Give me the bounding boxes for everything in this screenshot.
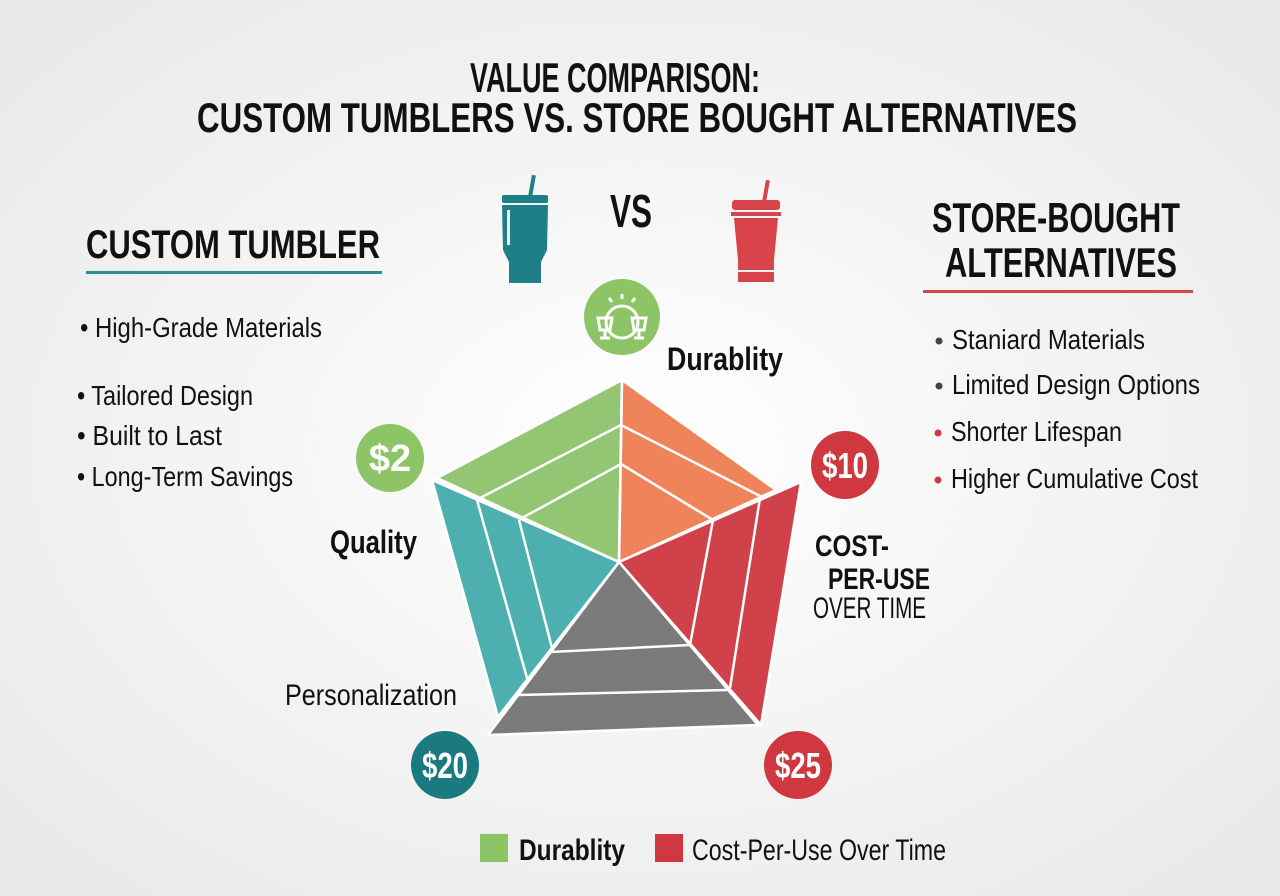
heading: custom tumbler <box>86 223 382 274</box>
list: store-bought drawbacks: Staniard Materials <box>952 324 1145 355</box>
heading: store-bought alternatives: STORE-BOUGHT <box>932 194 1180 241</box>
axis label: durability: Durablity <box>667 341 783 377</box>
title <box>197 54 1077 141</box>
legend: Cost-Per-Use Over Time <box>692 834 946 867</box>
list: store-bought drawbacks: Limited Design Options <box>952 369 1200 400</box>
icon: durability badge <box>584 279 660 355</box>
vs label: VS <box>610 185 652 237</box>
list: custom tumbler benefits: • High-Grade Materials <box>80 312 322 343</box>
legend <box>480 834 946 867</box>
badge: $10: $10 <box>822 445 868 486</box>
heading: store-bought alternatives: ALTERNATIVES <box>945 239 1177 286</box>
list: custom tumbler benefits <box>77 312 322 492</box>
badge: $25: $25 <box>775 745 821 786</box>
badge: $2: $2 <box>369 438 411 480</box>
axis label: cost-per-use: OVER TIME <box>813 592 926 625</box>
badge: $10 <box>811 431 879 499</box>
axis label: cost-per-use <box>813 530 930 625</box>
list: custom tumbler benefits: • Long-Term Savings <box>77 461 293 492</box>
list: store-bought drawbacks: Higher Cumulative Cost <box>951 463 1198 494</box>
badge: $20 <box>411 731 479 799</box>
axis label: cost-per-use: PER-USE <box>828 563 930 596</box>
icon: teal tumbler <box>502 175 548 283</box>
axis label: cost-per-use: COST- <box>815 530 889 563</box>
list: store-bought drawbacks: Shorter Lifespan <box>951 416 1122 447</box>
legend: Durablity <box>519 834 625 867</box>
axis label: quality: Quality <box>330 524 417 560</box>
heading: custom tumbler: CUSTOM TUMBLER <box>86 223 380 267</box>
axis label: personalization: Personalization <box>285 679 457 712</box>
badge: $2 <box>356 424 424 492</box>
list: store-bought drawbacks <box>934 324 1200 494</box>
radar chart <box>432 380 801 735</box>
badge: $20: $20 <box>422 745 468 786</box>
icon: red tumbler <box>731 180 781 282</box>
list: custom tumbler benefits: • Built to Last <box>77 420 222 451</box>
title: VALUE COMPARISON: <box>470 54 760 101</box>
badge: $25 <box>764 731 832 799</box>
list: custom tumbler benefits: • Tailored Design <box>77 380 253 411</box>
heading: store-bought alternatives <box>923 194 1193 293</box>
